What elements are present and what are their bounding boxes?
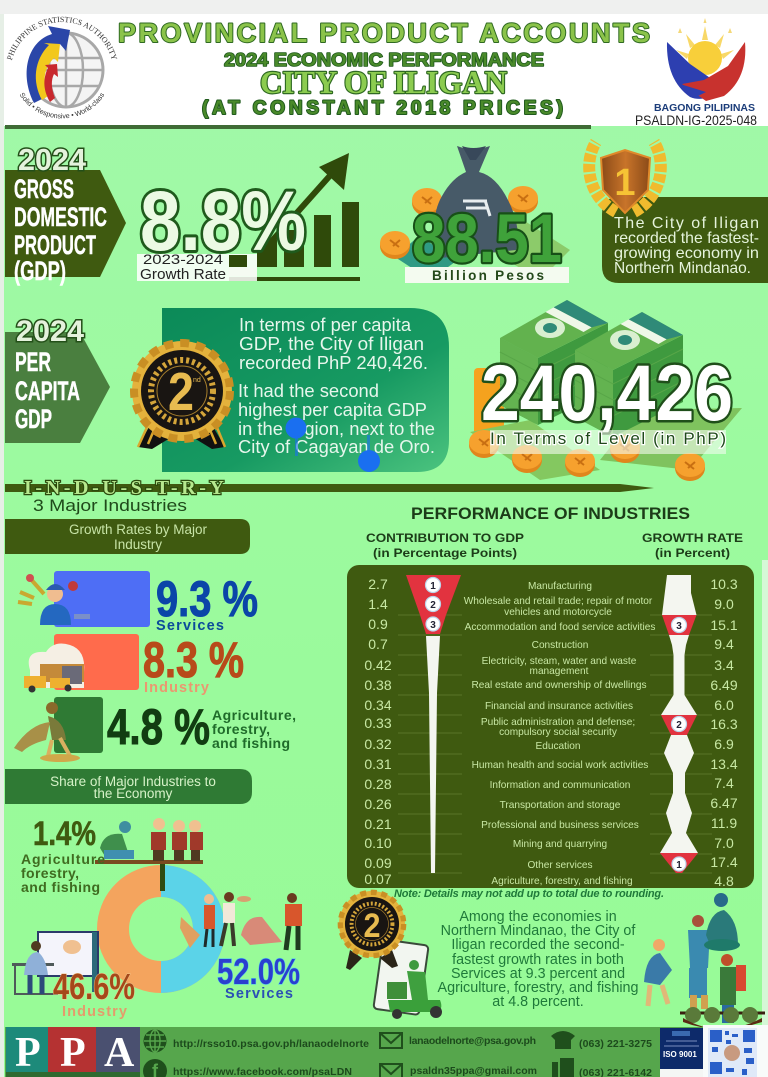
growth values: 17.4 (710, 854, 738, 870)
callout: fastest growing (589, 142, 768, 283)
heading: 2024: 2024 (18, 142, 87, 177)
header band (4, 14, 768, 129)
text: second fastest: at 4.8 percent. (492, 994, 584, 1010)
growth values: 9.4 (714, 636, 734, 652)
industry growth row (24, 632, 244, 696)
panel: per capita text: It had the second (238, 381, 379, 401)
industry share (53, 966, 135, 1020)
icon: money bag with coins (380, 146, 570, 280)
growth values: 10.3 (710, 576, 738, 592)
icon: rank 1 shield with laurel: 1 (614, 162, 636, 204)
icon: 2nd place medal small (339, 891, 405, 970)
industry names: vehicles and motorcycle (504, 607, 612, 618)
services share (217, 951, 300, 1002)
total GDP value: 88.51 (412, 200, 562, 277)
column heading: contribution (366, 531, 524, 560)
callout: fastest growing: recorded the fastest- (614, 230, 759, 247)
industry names: Real estate and ownership of dwellings (471, 680, 647, 691)
text: second fastest: Services at 9.3 percent and (451, 966, 625, 982)
contribution values: 0.38 (364, 677, 392, 693)
industry names: Construction (532, 640, 588, 651)
per capita caption: In Terms of Level (in PhP) (490, 429, 726, 448)
industry share: 46.6% (53, 966, 135, 1007)
contribution values: 0.32 (364, 736, 392, 752)
column heading: contribution: CONTRIBUTION TO GDP (366, 531, 524, 545)
icon: 2nd place medal (132, 341, 232, 449)
services share: 52.0% (217, 951, 300, 992)
logo: Philippine Statistics Authority: PHILIPPINE STATISTICS AUTHORITY (6, 16, 118, 60)
growth values: 16.3 (710, 716, 738, 732)
contribution values: 0.09 (364, 855, 392, 871)
agriculture share: 1.4% (33, 815, 96, 853)
growth values: 7.4 (714, 775, 734, 791)
text: second fastest (438, 909, 639, 1010)
icon: 2nd place medal: 2 (168, 362, 194, 422)
industry names: Transportation and storage (500, 800, 621, 811)
icon: desktop worker (12, 932, 98, 995)
contribution values: 0.26 (364, 796, 392, 812)
logo: PPA squares: P (60, 1030, 86, 1076)
icon: farmer and three children (100, 818, 203, 861)
growth rate caption (137, 251, 257, 283)
industry names: Human health and social work activities (472, 760, 648, 771)
icon: rank 1 shield with laurel (589, 142, 661, 213)
badge: ISO 9001: ISO 9001 (663, 1050, 697, 1059)
donut chart: share of economy (95, 860, 225, 993)
QR code (708, 1028, 757, 1077)
growth values: 6.49 (710, 677, 738, 693)
email address: lanaodelnorte@psa.gov.ph (409, 1035, 536, 1047)
column heading: growth rate: GROWTH RATE (642, 531, 743, 545)
funnel: growth rate (660, 575, 698, 873)
service growth row (18, 571, 258, 634)
contribution values: 0.7 (368, 636, 388, 652)
title: PROVINCIAL PRODUCT ACCOUNTS (118, 18, 650, 48)
industry share: Industry (62, 1004, 127, 1020)
label: Agriculture, (212, 707, 296, 723)
funnel: growth rate: 3 (676, 621, 682, 632)
icon: delivery scooter and phone (373, 939, 442, 1019)
growth values: 7.0 (714, 835, 734, 851)
logo: PPA squares: P (15, 1030, 41, 1076)
icon: fax (552, 1058, 574, 1077)
chart icon: rising bars and arrow (229, 153, 360, 281)
growth values: 6.9 (714, 736, 734, 752)
icon: service workers with food (180, 892, 302, 950)
badge: ISO 9001 (660, 1028, 703, 1077)
callout: fastest growing: The City of Iligan (614, 215, 759, 232)
panel heading: share of industries (5, 769, 252, 804)
section: per capita GDP (5, 300, 742, 481)
icon: web globe (144, 1030, 166, 1052)
callout: fastest growing: growing economy in (614, 245, 759, 262)
column heading: growth rate (642, 531, 743, 560)
agriculture share: and fishing (21, 879, 100, 895)
industry names: Financial and insurance activities (485, 701, 633, 712)
arrow label: gross domestic product: DOMESTIC (14, 202, 107, 232)
icon: service worker (18, 574, 90, 625)
industry names: Manufacturing (528, 581, 592, 592)
label: Industry (144, 680, 209, 696)
icon: factory and trucks (24, 644, 84, 692)
contribution values: 0.42 (364, 657, 392, 673)
icon: facebook (143, 1059, 167, 1077)
per capita value: 240,426 (481, 348, 733, 437)
logo: PPA squares: A (104, 1030, 135, 1076)
subtitle: economic performance: 2024 ECONOMIC PERFORMANCE (224, 50, 544, 70)
arrow label: per capita GDP (5, 332, 110, 443)
text: second fastest: Iligan recorded the second- (451, 937, 625, 953)
column heading: contribution: (in Percentage Points) (373, 546, 517, 560)
panel heading: share of industries: the Economy (94, 786, 173, 801)
growth values: 13.4 (710, 756, 738, 772)
industry names: Agriculture, forestry, and fishing (491, 876, 633, 887)
industry names: Other services (527, 860, 593, 871)
panel: per capita text: In terms of per capita (239, 315, 412, 335)
contribution values: 1.4 (368, 596, 388, 612)
text: second fastest: Agriculture, forestry, and fishing (438, 980, 639, 996)
contribution values: 0.33 (364, 715, 392, 731)
contribution values: 0.21 (364, 816, 392, 832)
total GDP caption (405, 267, 569, 283)
industry names (464, 581, 655, 887)
value: 4.8 % (107, 699, 210, 755)
funnel: growth rate: 1 (676, 860, 682, 871)
contribution values (364, 576, 392, 887)
agriculture share (21, 815, 105, 895)
growth rate value: 8.8% (140, 174, 306, 268)
funnel: contribution to GDP: 3 (430, 620, 436, 631)
label: Bagong Pilipinas: BAGONG PILIPINAS (654, 102, 755, 114)
panel: per capita text: City of Cagayan de Oro. (238, 437, 435, 457)
industry names: Information and communication (490, 780, 630, 791)
icon: 2nd place medal: nd (193, 377, 201, 384)
growth values: 11.9 (711, 815, 737, 831)
panel heading: growth rates: Industry (114, 537, 162, 552)
column heading: growth rate: (in Percent) (655, 546, 730, 560)
total GDP caption: Billion Pesos (432, 268, 544, 283)
industry names: management (530, 666, 589, 677)
funnel: contribution to GDP (406, 575, 461, 873)
icon: farmers with plants (644, 893, 765, 1029)
callout: fastest growing: Northern Mindanao. (614, 260, 751, 277)
website link: http://rsso10.psa.gov.ph/lanaodelnorte (173, 1038, 369, 1050)
icon: money stacks and coins (469, 300, 742, 481)
heading: industry: I-N-D-U-S-T-R-Y (24, 477, 225, 499)
industry names: Wholesale and retail trade; repair of motor (464, 596, 653, 607)
arrow label: gross domestic product (5, 170, 126, 286)
arrow label: gross domestic product: GROSS (14, 174, 74, 204)
icon: email second (380, 1064, 402, 1077)
contribution values: 0.28 (364, 776, 392, 792)
growth values: 6.47 (710, 795, 738, 811)
industry names: Public administration and defense; (481, 717, 635, 728)
growth rate caption: 2023-2024 (143, 251, 223, 267)
industry names: compulsory social security (499, 727, 618, 738)
arrow label: per capita GDP: CAPITA (15, 376, 80, 406)
logo: PPA squares (6, 1027, 140, 1077)
panel: industry performance table (347, 565, 754, 889)
contribution values: 0.9 (368, 616, 388, 632)
industry names: Education (536, 741, 580, 752)
table note: Note: Details may not add up to total due to rounding. (394, 888, 664, 900)
text: second fastest: fastest growth rates in both (452, 952, 624, 968)
icon: email (380, 1033, 402, 1048)
label (212, 707, 296, 751)
funnel: growth rate: 2 (676, 720, 682, 731)
growth values: 3.4 (714, 657, 734, 673)
industry names: Professional and business services (481, 820, 639, 831)
logo: Philippine Statistics Authority (6, 16, 118, 118)
contribution values: 0.07 (364, 871, 392, 887)
icon: telephone (551, 1031, 575, 1049)
label: forestry, (212, 721, 270, 737)
text: second fastest: Among the economies in (459, 909, 617, 925)
growth rate caption: Growth Rate (140, 266, 226, 283)
icon: farmer (14, 702, 80, 762)
blue marker dots (286, 418, 380, 472)
contribution values: 0.34 (364, 697, 392, 713)
agriculture share: forestry, (21, 865, 79, 881)
section: GDP (5, 142, 768, 286)
growth values (710, 576, 738, 889)
agriculture share: Agriculture (21, 851, 105, 867)
growth values: 4.8 (714, 873, 734, 889)
growth values: 9.0 (714, 596, 734, 612)
panel heading: growth rates: Growth Rates by Major (69, 522, 208, 537)
industry names: Accommodation and food service activities (465, 622, 655, 633)
footer band (5, 1025, 768, 1077)
subheading: 3 major industries: 3 Major Industries (33, 497, 187, 515)
contribution values: 0.10 (364, 835, 392, 851)
contribution values: 0.31 (364, 756, 392, 772)
email address second: psaldn35ppa@gmail.com (410, 1065, 537, 1077)
arrow label: per capita GDP: PER (15, 347, 51, 377)
panel heading: share of industries: Share of Major Industries to (50, 774, 216, 789)
value: 9.3 % (156, 571, 258, 627)
icon: 2nd place medal small: 2 (364, 907, 380, 945)
telephone number: (063) 221-3275 (579, 1038, 652, 1050)
text: second fastest: Northern Mindanao, the City of (441, 923, 635, 939)
label: Services (156, 618, 224, 634)
heading: industry (5, 477, 654, 499)
arrow label: gross domestic product: PRODUCT (14, 230, 96, 260)
funnel: contribution to GDP: 1 (430, 581, 436, 592)
industry names: Mining and quarrying (513, 839, 607, 850)
subtitle: city of Iligan: CITY OF ILIGAN (260, 64, 507, 100)
logo: Bagong Pilipinas (667, 18, 745, 101)
contribution values: 2.7 (368, 576, 388, 592)
services share: Services (225, 986, 293, 1002)
arrow label: per capita GDP: GDP (15, 404, 52, 434)
value: 8.3 % (143, 632, 244, 688)
growth values: 6.0 (714, 697, 734, 713)
agriculture growth row (14, 697, 296, 762)
subtitle: constant prices: (AT CONSTANT 2018 PRICES) (202, 98, 563, 119)
arrow label: gross domestic product: (GDP) (14, 256, 66, 286)
label: and fishing (212, 735, 290, 751)
heading: 2024: 2024 (16, 315, 84, 348)
logo: Philippine Statistics Authority: Solid • Responsive • World-class (20, 92, 104, 118)
panel heading: growth rates (5, 519, 250, 554)
panel: per capita text (162, 308, 449, 472)
industry names: Electricity, steam, water and waste (482, 656, 637, 667)
growth values: 15.1 (710, 617, 738, 633)
heading: performance of industries: PERFORMANCE OF INDUSTRIES (411, 505, 690, 523)
panel: per capita text: recorded PhP 240,426. (239, 353, 428, 373)
panel: per capita text: GDP, the City of Iligan (239, 334, 424, 354)
funnel: contribution to GDP: 2 (430, 600, 436, 611)
panel: per capita text: in the region, next to the (238, 419, 435, 439)
panel: per capita text: highest per capita GDP (238, 400, 427, 420)
